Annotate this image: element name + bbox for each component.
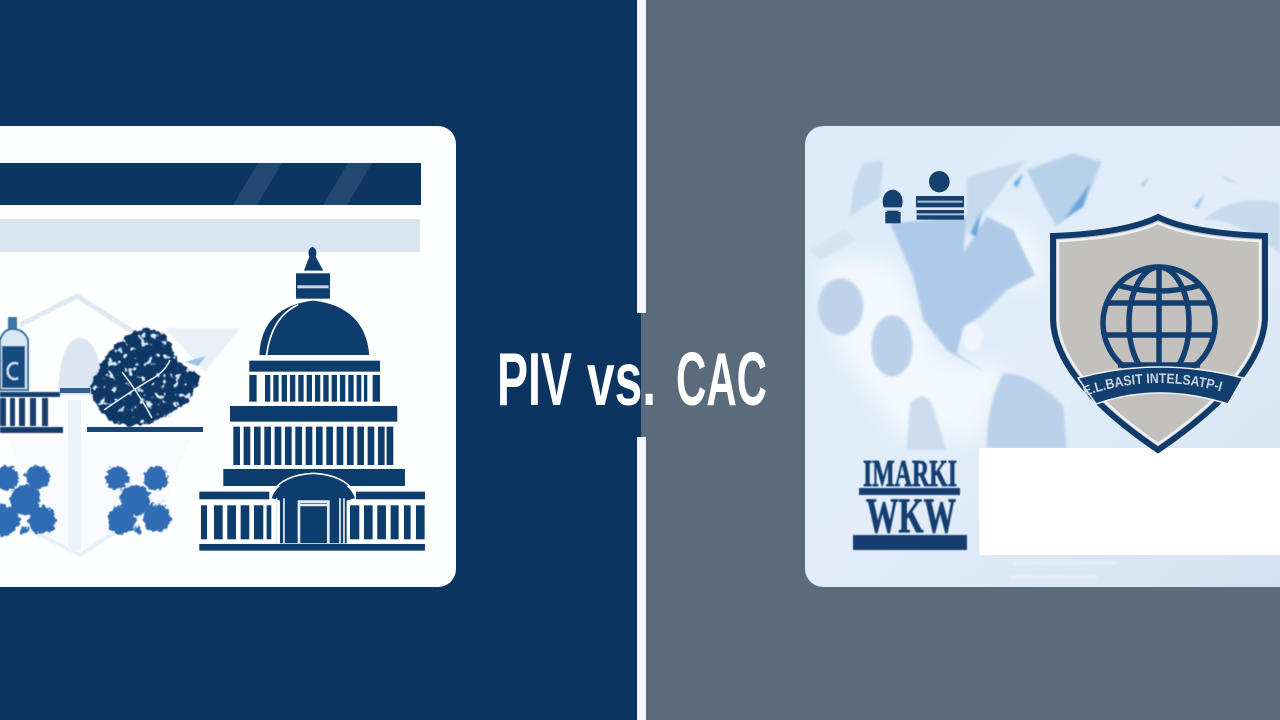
- white signature box: [979, 448, 1280, 555]
- rock shelf: [87, 427, 203, 432]
- upper colonnade: [249, 375, 380, 402]
- icon: blue flower left: [0, 465, 56, 536]
- panel: CAC background: [641, 0, 1280, 720]
- finial: [304, 247, 323, 271]
- rock veins: [104, 360, 170, 418]
- shield inner line: [1058, 223, 1260, 444]
- lantern: [296, 273, 330, 299]
- small icon: person badge right: [916, 171, 964, 220]
- panel: PIV background: [0, 0, 641, 720]
- middle colonnade: [233, 427, 393, 465]
- agency base bar: [853, 535, 967, 550]
- shield banner: [1078, 367, 1243, 404]
- panel: CAC card: [805, 126, 1280, 587]
- continents: [810, 160, 1067, 450]
- faint text under white box: [1010, 563, 1117, 577]
- title: CAC: [676, 337, 767, 421]
- banner text: E.L.BASIT INTELSATP-I: [1082, 373, 1222, 396]
- card subheader band: [0, 219, 420, 252]
- header band stripes: [233, 163, 372, 205]
- portico: [272, 474, 355, 543]
- card body: [805, 126, 1280, 587]
- agency text line 1: IMARKI: [863, 453, 957, 495]
- wings: [199, 492, 269, 499]
- divider top: [637, 0, 646, 313]
- small icon: person badge left: [883, 190, 903, 223]
- icon: dark speckled rock: [90, 329, 200, 426]
- agency mark: [853, 453, 967, 550]
- title: PIV: [497, 337, 572, 421]
- icon: globe: [1103, 267, 1215, 379]
- icon: blue flower right: [105, 466, 171, 534]
- agency rule: [859, 488, 960, 495]
- North America: [890, 153, 1280, 373]
- divider bottom: [637, 437, 646, 720]
- icon: bottle: [0, 317, 28, 390]
- soft cloud highlights: [820, 220, 1047, 440]
- dome: [259, 301, 369, 355]
- icon: connector line: [60, 388, 90, 393]
- shield outline and fill: [1053, 217, 1265, 450]
- shield emblem: [1050, 214, 1268, 454]
- base: [199, 544, 425, 551]
- panel: PIV card: [0, 126, 456, 587]
- agency text line 2: WKW: [866, 487, 956, 543]
- title: [497, 337, 767, 421]
- door: [299, 502, 328, 543]
- title: vs.: [587, 337, 656, 421]
- card header band: [0, 163, 421, 205]
- icon: capitol building: [199, 247, 425, 551]
- world map background: [810, 153, 1280, 577]
- emblem: faint seal background: [10, 296, 240, 555]
- icon: small colonnade: [0, 392, 63, 433]
- card body: [0, 126, 456, 587]
